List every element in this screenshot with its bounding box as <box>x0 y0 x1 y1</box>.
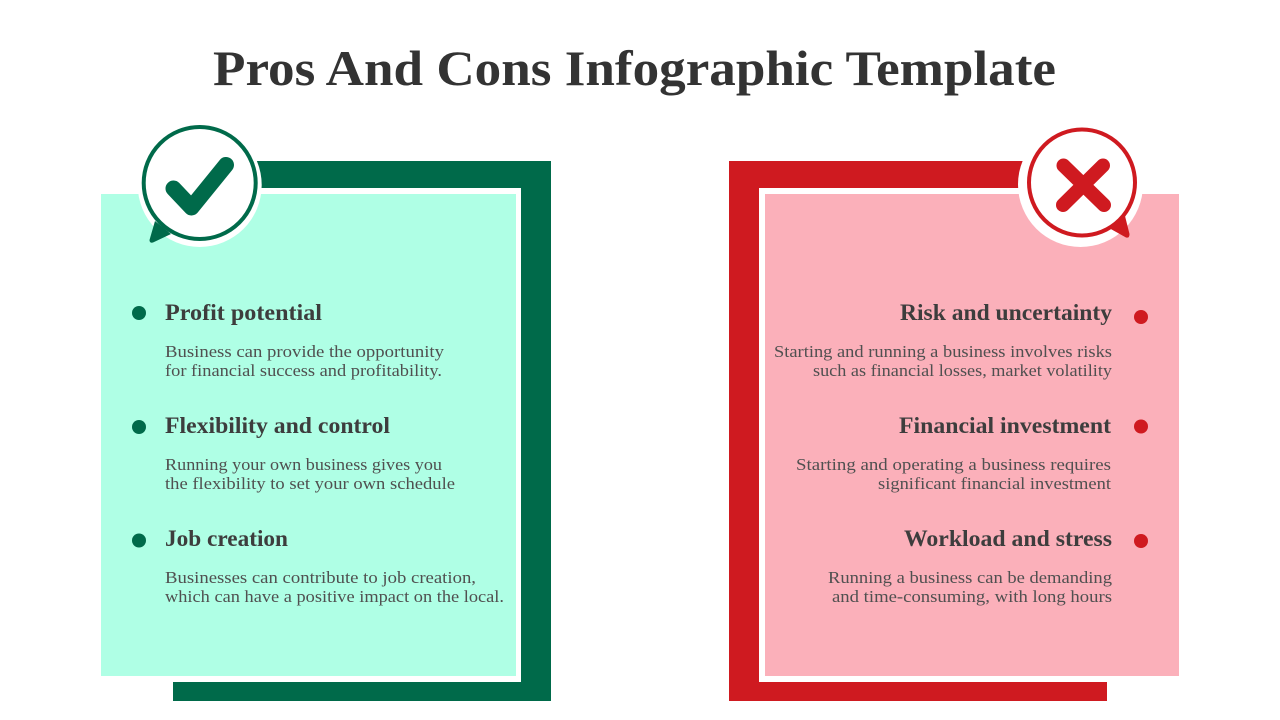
panel: cons <box>729 122 1179 701</box>
item: job creation: Businesses can contribute to job creation, <box>165 568 476 587</box>
item: risk and uncertainty: Starting and running a business involves risks <box>774 342 1112 361</box>
pink card <box>765 194 1179 676</box>
item: profit potential: Business can provide the opportunity <box>165 342 445 361</box>
item: flexibility and control: Running your own business gives you <box>165 455 443 474</box>
icon: x mark speech bubble <box>1018 122 1143 247</box>
green backing frame <box>173 161 551 701</box>
item: flexibility and control: the flexibility to set your own schedule <box>165 474 455 493</box>
item: risk and uncertainty: such as financial losses, market volatility <box>813 361 1113 380</box>
item: financial investment: Starting and operating a business requires <box>796 455 1111 474</box>
item: risk and uncertainty <box>774 300 1148 380</box>
item: workload and stress <box>828 526 1148 606</box>
white gap <box>759 188 1179 682</box>
item: profit potential: for financial success and profitability. <box>165 361 442 380</box>
item: flexibility and control: Flexibility and control <box>165 413 390 438</box>
panel: pros <box>101 123 551 701</box>
item: profit potential: Profit potential <box>165 300 322 325</box>
title: Pros And Cons Infographic Template <box>213 40 1056 96</box>
item: financial investment: Financial investment <box>899 413 1111 438</box>
item: job creation <box>132 526 504 606</box>
icon: check mark speech bubble <box>138 123 262 247</box>
mint card <box>101 194 516 676</box>
item: financial investment: significant financial investment <box>878 474 1111 493</box>
item: profit potential <box>132 300 445 380</box>
item: risk and uncertainty: Risk and uncertainty <box>900 300 1112 325</box>
item: workload and stress: Workload and stress <box>904 526 1112 551</box>
item: job creation: which can have a positive impact on the local. <box>165 587 504 606</box>
item: workload and stress: Running a business can be demanding <box>828 568 1113 587</box>
item: flexibility and control <box>132 413 455 493</box>
item: financial investment <box>796 413 1148 493</box>
white gap <box>101 188 521 682</box>
item: job creation: Job creation <box>165 526 288 551</box>
red backing frame <box>729 161 1107 701</box>
item: workload and stress: and time-consuming, with long hours <box>832 587 1112 606</box>
